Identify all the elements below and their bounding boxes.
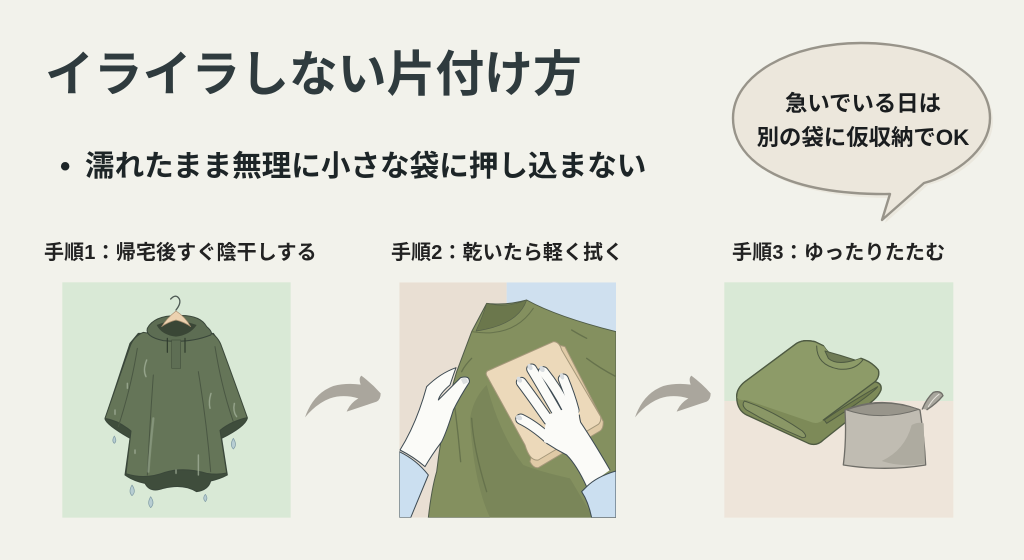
hood <box>147 316 211 341</box>
arrow from step 1 to step 2 <box>305 376 381 417</box>
speech bubble callout <box>733 43 993 223</box>
olive shirt <box>428 300 616 518</box>
icon: folded garment <box>737 341 881 444</box>
towel <box>530 345 603 468</box>
arrow from step 2 to step 3 <box>635 376 711 417</box>
icon: water drops <box>113 436 235 508</box>
folds <box>118 347 233 475</box>
left sleeve <box>399 452 428 518</box>
left hand <box>400 368 469 467</box>
icon: zip pouch <box>843 392 943 468</box>
step 3 label: 手順3：ゆったりたたむ <box>732 242 945 264</box>
panel: step 3 folded poncho and pouch <box>724 282 953 518</box>
title: イライラしない片付け方 <box>45 48 582 102</box>
bullet point text: • <box>60 150 70 183</box>
speech bubble callout: 別の袋に仮収納でOK <box>757 125 969 150</box>
step 1 label: 手順1：帰宅後すぐ陰干しする <box>44 242 317 264</box>
bullet point text <box>60 150 646 183</box>
placket and cords <box>172 340 181 368</box>
highlights <box>115 360 237 475</box>
panel: step 2 wiping shirt <box>399 282 616 518</box>
step 2 label: 手順2：乾いたら軽く拭く <box>391 242 623 264</box>
icon: hanger <box>171 296 180 310</box>
speech bubble callout: 急いでいる日は <box>785 91 941 116</box>
right sleeve <box>582 471 616 518</box>
right hand <box>515 363 610 487</box>
icon: poncho <box>105 311 247 492</box>
text: 濡れたまま無理に小さな袋に押し込まない <box>85 150 646 183</box>
panel: step 1 hanging poncho <box>62 282 291 518</box>
